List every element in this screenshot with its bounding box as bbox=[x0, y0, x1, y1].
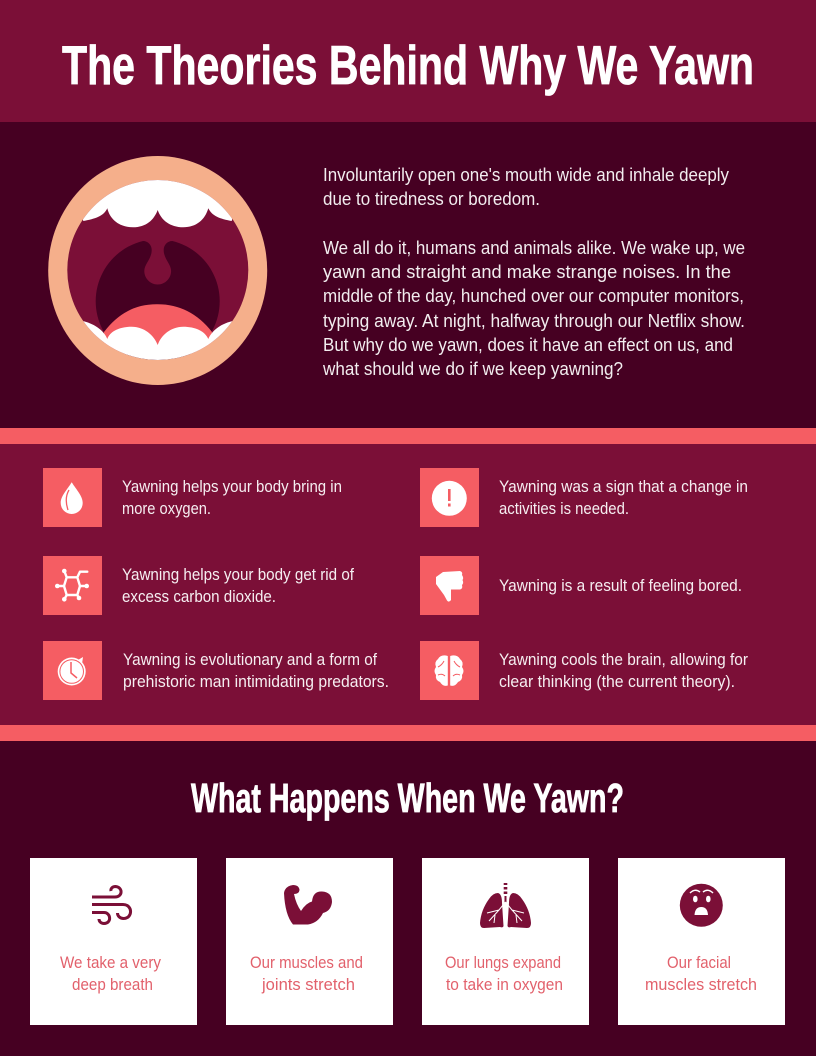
card: muscles: Our muscles and bbox=[250, 954, 363, 972]
theory: bored bbox=[420, 556, 742, 615]
text: description: yawn and straight and make strange noises. In the bbox=[323, 262, 731, 282]
theory: cools the brain bbox=[420, 641, 748, 700]
panel: what happens bbox=[0, 741, 816, 1056]
card: deep breath: deep breath bbox=[72, 976, 153, 994]
illustration: open mouth bbox=[48, 156, 267, 385]
card: lungs: to take in oxygen bbox=[446, 976, 563, 994]
card: muscles: joints stretch bbox=[261, 976, 355, 994]
theory: oxygen: more oxygen. bbox=[122, 500, 211, 518]
theory: change in activities bbox=[420, 468, 748, 527]
text: description: middle of the day, hunched over our computer monitors, bbox=[323, 286, 744, 306]
panel: header bbox=[0, 0, 816, 122]
icon: wind bbox=[92, 886, 131, 924]
card: lungs bbox=[422, 858, 589, 1025]
panel: theories bbox=[0, 428, 816, 741]
text: definition: due to tiredness or boredom. bbox=[323, 189, 540, 209]
theory: bored: Yawning is a result of feeling bored. bbox=[499, 577, 742, 595]
text: definition: Involuntarily open one's mouth wide and inhale deeply bbox=[323, 165, 729, 185]
text: description: We all do it, humans and animals alike. We wake up, we bbox=[323, 238, 745, 258]
text: description: what should we do if we keep yawning? bbox=[322, 359, 623, 379]
card: facial muscles: Our facial bbox=[667, 954, 731, 972]
card: deep breath bbox=[30, 858, 197, 1025]
text: description: But why do we yawn, does it have an effect on us, and bbox=[323, 335, 733, 355]
theory: carbon dioxide: Yawning helps your body get rid of bbox=[122, 566, 354, 584]
text: description: typing away. At night, halfway through our Netflix show. bbox=[323, 311, 745, 331]
card: lungs: Our lungs expand bbox=[445, 954, 561, 972]
icon: surprised face bbox=[680, 884, 723, 927]
icon: lungs bbox=[480, 883, 531, 928]
card: facial muscles: muscles stretch bbox=[645, 976, 757, 994]
theory: oxygen: Yawning helps your body bring in bbox=[122, 478, 342, 496]
text: definition bbox=[323, 165, 729, 209]
theory: evolutionary bbox=[43, 641, 389, 700]
text: description bbox=[322, 238, 745, 379]
card: muscles bbox=[226, 858, 393, 1025]
heading: What Happens When We Yawn? bbox=[191, 775, 624, 821]
theory: change in activities: Yawning was a sign that a change in bbox=[499, 478, 748, 496]
theory: carbon dioxide: excess carbon dioxide. bbox=[122, 588, 276, 606]
theory: carbon dioxide bbox=[43, 556, 354, 615]
card: deep breath: We take a very bbox=[60, 954, 162, 972]
theory: change in activities: activities is needed. bbox=[499, 500, 629, 518]
panel: introduction bbox=[48, 156, 744, 385]
icon: flexed arm bbox=[284, 885, 332, 924]
theory: oxygen bbox=[43, 468, 342, 527]
card: facial muscles bbox=[618, 858, 785, 1025]
theory: cools the brain: clear thinking (the current theory). bbox=[499, 673, 735, 691]
theory: evolutionary: prehistoric man intimidating predators. bbox=[123, 673, 389, 691]
theory: cools the brain: Yawning cools the brain, allowing for bbox=[499, 651, 748, 669]
theory: evolutionary: Yawning is evolutionary and a form of bbox=[123, 651, 377, 669]
